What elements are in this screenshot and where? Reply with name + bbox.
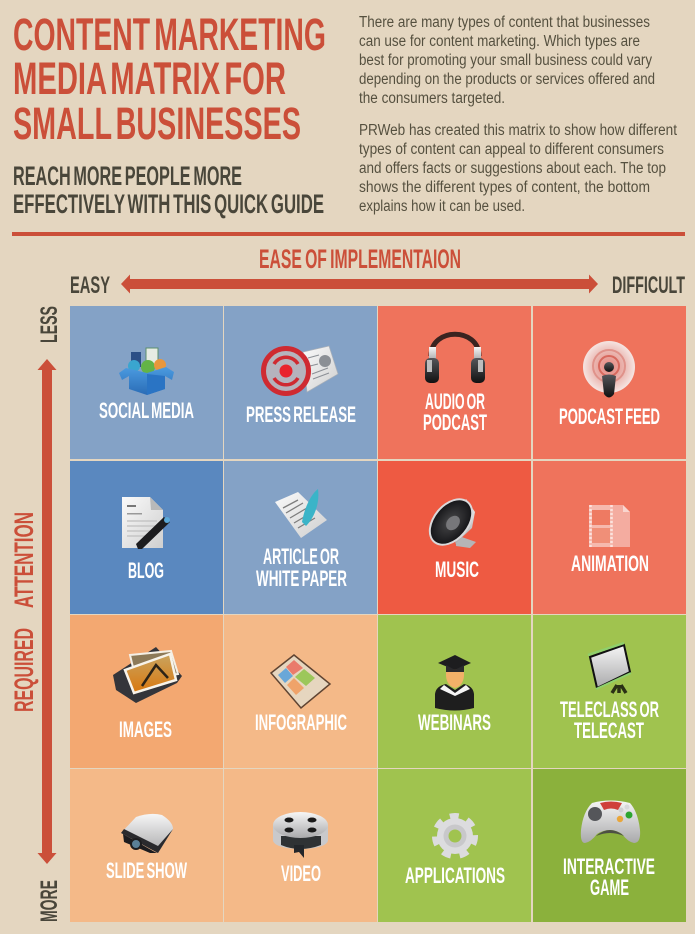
panel: webinars [378,615,531,768]
icon: projector [121,814,173,853]
label: MUSIC [435,557,479,582]
label: required attention: ATTENTION [9,512,39,608]
icon: film reel [273,812,328,858]
icon: film page [589,505,630,547]
icon: podcast microphone [583,341,635,398]
subtitle: REACH MORE PEOPLE MORE [13,161,242,191]
panel: infographic [224,615,377,768]
icon: headphones [425,334,485,383]
label: VIDEO [281,861,321,886]
icon: infographic sheet [271,655,330,708]
panel: audio or podcast [378,306,531,459]
label: TELECAST [574,718,644,743]
panel: press release [224,306,377,459]
panel: slide show [70,769,223,922]
icon: social media box [119,348,174,395]
subtitle: EFFECTIVELY WITH THIS QUICK GUIDE [13,189,324,219]
label [256,544,347,591]
label: SOCIAL MEDIA [99,398,194,423]
panel: social media [70,306,223,459]
label: GAME [590,875,629,900]
label: APPLICATIONS [405,863,505,888]
label: required attention: REQUIRED [9,628,39,712]
text block: introduction: depending on the products or services offered and [359,71,655,88]
arrow: horizontal [121,274,598,294]
icon: press release target and paper [264,346,338,394]
label: ARTICLE OR [263,544,339,569]
label: SLIDE SHOW [106,858,187,883]
label: PRESS RELEASE [246,402,356,427]
title: SMALL BUSINESSES [13,98,301,149]
panel: article or white paper [224,461,377,614]
subtitle [13,161,324,219]
panel: music [378,461,531,614]
text block: introduction: best for promoting your small business could vary [359,52,652,69]
label: ANIMATION [571,551,649,576]
icon: projection screen [588,643,631,693]
icon: graduate [435,655,474,710]
title: CONTENT MARKETING [13,9,326,60]
label: PODCAST [423,410,487,435]
text block: introduction [359,14,678,215]
text block: introduction: There are many types of content that businesses [359,14,650,31]
label: easy: EASY [70,272,110,299]
icon: paper and quill [275,489,327,538]
text block: introduction: shows the different types of content, the bottom [359,179,650,196]
panel: video [224,769,377,922]
label: IMAGES [119,717,172,742]
panel: blog [70,461,223,614]
panel: interactive game [533,769,686,922]
label [560,697,659,743]
label: AUDIO OR [425,389,485,414]
label [563,854,655,900]
text block: introduction: the consumers targeted. [359,90,505,107]
panel: podcast feed [533,306,686,459]
icon: photo stack [113,647,182,703]
heading: ease of implementation: EASE OF IMPLEMENTAION [259,244,461,274]
arrow: vertical [38,359,56,864]
label: WEBINARS [418,710,491,735]
panel: teleclass or telecast [533,615,686,768]
label: WHITE PAPER [256,566,347,591]
label: BLOG [128,558,164,583]
panel: applications [378,769,531,922]
panel: animation [533,461,686,614]
panel: images [70,615,223,768]
label: more: MORE [36,880,63,922]
title: MEDIA MATRIX FOR [13,53,286,104]
title [13,9,326,149]
text block: introduction: explains how it can be used. [359,198,525,215]
icon: gear [436,817,474,855]
icon: blog page and pen [122,497,170,549]
label: less: LESS [36,306,63,343]
icon: speaker [420,490,482,554]
text block: introduction: can use for content marketing. Which types are [359,33,640,50]
label [423,389,487,435]
icon: game controller [581,800,640,843]
label: INFOGRAPHIC [255,710,347,735]
